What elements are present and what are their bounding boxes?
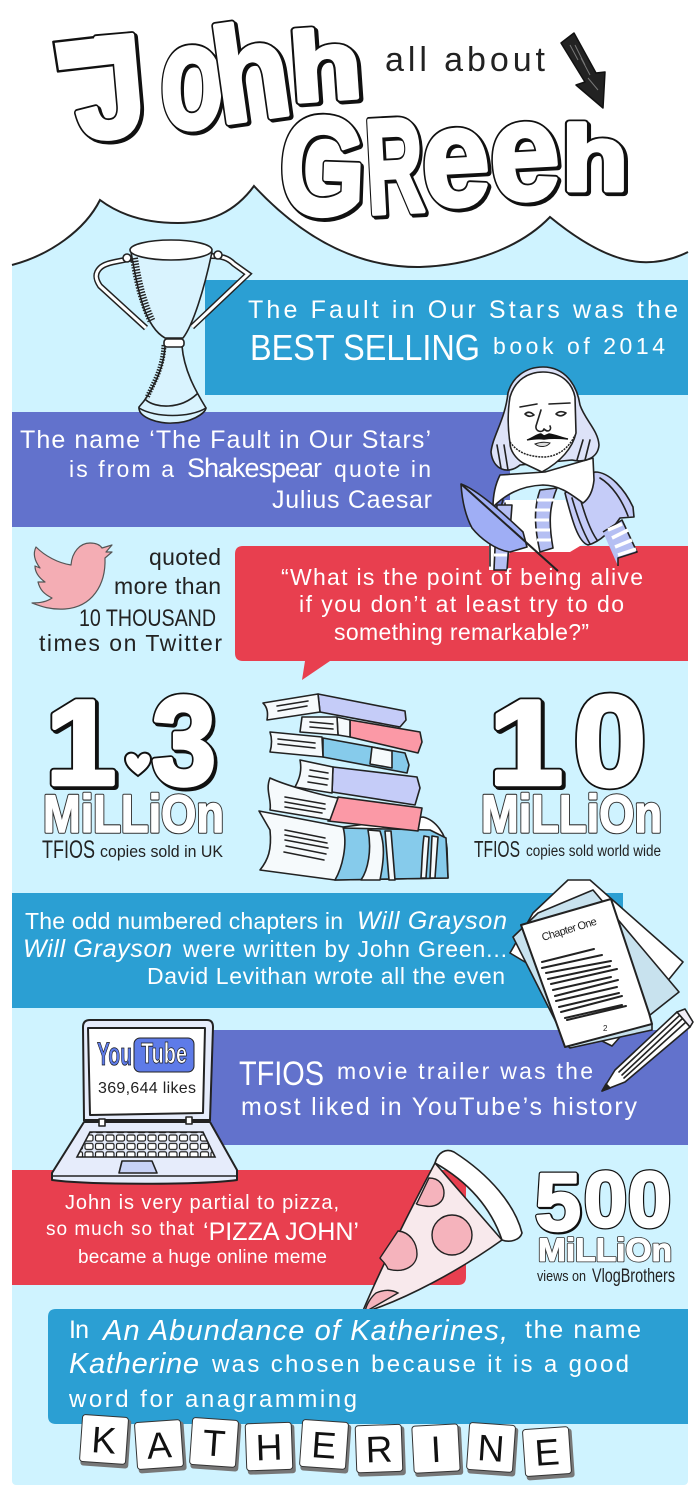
sub: feather quill: [461, 484, 527, 552]
wave outline: [12, 186, 688, 267]
number: 1.3: 1: [46, 676, 116, 810]
text: quote: if you don’t at least try to do: [299, 591, 624, 617]
text: Julius Caesar: Julius Caesar: [272, 486, 432, 514]
text: best selling emphasis: BEST SELLING: [250, 327, 480, 368]
title word: Green: e: [417, 77, 493, 237]
number: 10: 1: [489, 676, 563, 810]
text: Katherine: Katherine: [69, 1348, 199, 1380]
text: Shakespear: Shakespear: [187, 453, 322, 483]
text: was chosen: was chosen because it is a good: [211, 1351, 629, 1378]
number: 1.3: 3: [152, 672, 216, 811]
title word: Green: e: [485, 71, 563, 231]
tile E: [299, 1419, 352, 1474]
tile N: [466, 1422, 519, 1477]
sub: YouTube logo: Tube: [141, 1038, 187, 1070]
tile E: [522, 1426, 575, 1481]
title word: Green: R: [362, 89, 427, 243]
sub: central scarf: [535, 488, 557, 552]
number: 500: 0: [584, 1155, 627, 1243]
text: book of 2014: book of 2014: [493, 333, 665, 359]
title word: Green: R: [364, 91, 430, 245]
sub: page lines: [542, 949, 626, 1020]
tile T: T: [201, 1422, 227, 1465]
title word: John: J: [69, 5, 155, 173]
title word: John: h: [286, 8, 365, 123]
panel: Shakespeare quote source: [12, 412, 510, 527]
sub: chapter heading: Chapter One: [540, 916, 598, 944]
panel: Katherines: [48, 1309, 688, 1424]
sub: trackpad: [119, 1161, 157, 1173]
text: best selling line 1: The Fault in Our Stars was the: [248, 296, 678, 324]
title word: Green: G: [279, 88, 370, 248]
title word: Green: e: [419, 79, 496, 239]
stat: 500 million: [535, 1155, 675, 1287]
number: 500: 0: [628, 1155, 671, 1243]
icon: hatched arrow: [561, 33, 605, 108]
heart point: [125, 753, 151, 776]
number: 500: [535, 1155, 671, 1249]
title word: Green: R: [362, 89, 427, 243]
text: TFIOS: TFIOS: [239, 1055, 324, 1093]
tile I: I: [430, 1429, 442, 1470]
purple book 4: [332, 767, 420, 805]
illustration: Shakespeare with quill: [461, 367, 637, 571]
text: An Abundance of Katherines: An Abundance of Katherines,: [101, 1315, 508, 1347]
title word: Green: h: [562, 108, 628, 210]
icon: twitter bird: [32, 543, 112, 609]
title word: Green: e: [487, 72, 566, 233]
tile H: [245, 1422, 296, 1475]
text: John partial: John is very partial to pizza,: [65, 1192, 339, 1214]
text: twitter stat: [39, 544, 222, 656]
tile R: R: [365, 1429, 393, 1470]
title word: Green: h: [564, 110, 630, 212]
tile E: E: [310, 1424, 338, 1467]
title word: Green: [277, 70, 630, 248]
sub: face: [508, 372, 576, 472]
wave header: [0, 0, 700, 267]
tile E: E: [533, 1431, 561, 1474]
number: 10: [489, 670, 646, 813]
sub: right puff sleeve: [565, 472, 634, 545]
purple book 1: [318, 694, 406, 727]
title: all about: all about: [385, 41, 546, 79]
tile N: N: [476, 1427, 506, 1470]
illustration: stack of books: [259, 694, 448, 880]
number: 1.3: 3: [154, 674, 218, 813]
number: 1.3: 1: [48, 678, 118, 812]
caption: copies UK: copies sold in UK: [100, 842, 224, 861]
label: million: MiLLiOn: [43, 785, 224, 844]
text: quote: [281, 564, 643, 645]
text: quote: something remarkable?”: [334, 619, 589, 645]
sub: hair: [491, 367, 599, 470]
text: odd numbered: The odd numbered chapters in: [25, 908, 343, 934]
sub: pepperoni: [365, 1178, 472, 1312]
sub: striped sleeve: [603, 520, 637, 566]
label: million: MiLLiOn: [43, 785, 224, 844]
label: million: MiLLiOn: [538, 1232, 672, 1268]
panel: Will Grayson: [12, 893, 623, 1008]
number: 500: 5: [535, 1157, 581, 1248]
text: quote in: quote in: [334, 456, 431, 482]
panel: trailer: [210, 1030, 688, 1145]
text: twitter stat: times on Twitter: [39, 630, 222, 656]
pink book 2: [350, 720, 422, 753]
title word: Green: G: [277, 86, 368, 246]
text: so much: so much so that: [46, 1219, 195, 1240]
caption: copies UK: TFIOS: [42, 836, 95, 864]
text: Will Grayson italics: Will Grayson: [357, 907, 507, 935]
tile A: A: [145, 1424, 173, 1467]
tile R: [355, 1424, 406, 1477]
caption: copies UK: [42, 836, 224, 864]
stat: 10 million: [474, 670, 662, 862]
text: the name: the name: [525, 1316, 641, 1344]
number: 500: 5: [535, 1157, 581, 1248]
label: million: MiLLiOn: [481, 785, 662, 844]
text: twitter stat: more than: [114, 573, 221, 599]
sub: YouTube logo: You: [97, 1036, 132, 1072]
text: the name: The name ‘The Fault in Our Stars’: [20, 426, 431, 454]
caption: views on VlogBrothers: [537, 1266, 675, 1287]
stat: 1.3 million: [42, 672, 224, 864]
caption: views on VlogBrothers: VlogBrothers: [592, 1266, 675, 1287]
tile I: [412, 1424, 463, 1477]
caption: copies world wide: [474, 836, 661, 862]
panel: red speech bubble: [235, 546, 688, 680]
blue book 3: [323, 738, 409, 773]
text: twitter stat: 10 THOUSAND: [79, 605, 216, 632]
tiles: KATHERINE: [79, 1414, 575, 1481]
label: million: MiLLiOn: [481, 785, 662, 844]
number: 10: 0: [574, 670, 646, 813]
number: 500: 5: [536, 1158, 582, 1249]
title word: Green: h: [562, 108, 628, 210]
title word: John: h: [286, 8, 365, 123]
text: In: In: [69, 1316, 89, 1344]
number: 500: 0: [584, 1155, 627, 1243]
caption: views on VlogBrothers: views on: [537, 1268, 586, 1285]
number: 10: 1: [491, 678, 565, 812]
title word: John: J: [67, 3, 152, 171]
sub: likes count: 369,644 likes: [98, 1080, 196, 1097]
tile K: [79, 1414, 132, 1469]
number: 500: 0: [628, 1155, 671, 1243]
panel: best selling: [205, 280, 688, 395]
icon: trophy: [96, 240, 248, 423]
caption: copies world wide: copies sold world wide: [526, 843, 661, 860]
title word: Green: e: [417, 77, 493, 237]
illustration: laptop: [52, 1020, 237, 1184]
tile T: [189, 1417, 242, 1472]
title word: John: J: [67, 3, 152, 171]
title word: John: h: [288, 10, 367, 125]
text: were written: were written by John Green...: [182, 936, 507, 962]
sub: ruff collar: [493, 458, 594, 507]
number: 1.3: 3: [152, 672, 216, 811]
number: 10: 1: [489, 676, 563, 810]
number: 10: 0: [574, 670, 646, 813]
pink book 5: [328, 797, 422, 831]
caption: copies world wide: TFIOS: [474, 836, 520, 862]
number: 1.3: 1: [46, 676, 116, 810]
sub: YouTube logo: [97, 1036, 194, 1072]
text: Will Grayson italics line 2: Will Grayson: [23, 935, 172, 963]
tile H: H: [255, 1427, 283, 1468]
sub: keyboard: [77, 1132, 215, 1157]
text: PIZZA JOHN: ‘PIZZA JOHN’: [203, 1218, 359, 1246]
sub: page number: 2: [603, 1024, 608, 1033]
title: John Green: [51, 0, 630, 248]
icon: pencil: [602, 1009, 693, 1091]
text: is from a: is from a: [69, 456, 174, 482]
bottom book: [335, 817, 448, 880]
text: twitter stat: quoted: [149, 544, 221, 570]
title word: Green: G: [277, 86, 368, 246]
text: most liked: most liked in YouTube’s history: [241, 1093, 638, 1121]
number: 1.3: [46, 672, 218, 813]
text: David Levithan: David Levithan wrote all the even: [147, 963, 505, 989]
text: movie trailer: movie trailer was the: [337, 1058, 593, 1084]
text: word for anagramming: word for anagramming: [68, 1386, 357, 1413]
label: million: MiLLiOn: [538, 1232, 672, 1268]
text: quote: “What is the point of being alive: [281, 564, 643, 590]
title word: John: [51, 0, 367, 174]
title word: Green: e: [485, 71, 563, 231]
tile K: K: [90, 1419, 118, 1462]
panel: pizza John: [12, 1170, 466, 1285]
text: became: became a huge online meme: [78, 1247, 327, 1268]
illustration: chapter pages: [510, 880, 683, 1048]
tile A: [134, 1419, 187, 1474]
illustration: pizza slice: [362, 1150, 522, 1313]
